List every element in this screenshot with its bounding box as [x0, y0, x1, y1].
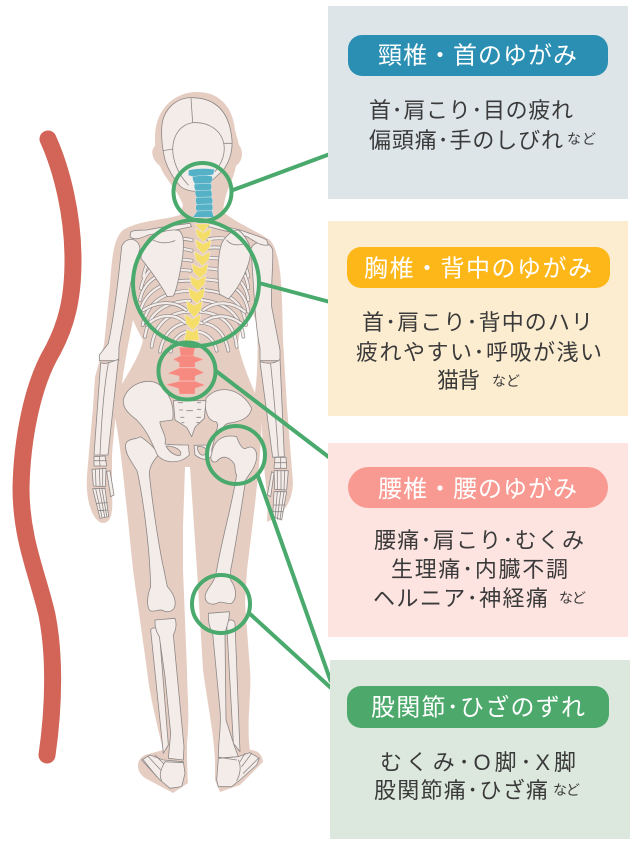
right tibia [208, 612, 238, 758]
lumbar heading [348, 467, 608, 508]
cervical symptoms: 偏頭痛･手のしびれ [369, 128, 563, 153]
left foot [142, 755, 185, 788]
joints symptoms: など [553, 782, 580, 798]
joints symptoms [374, 750, 580, 803]
joints heading: 股関節･ひざのずれ [371, 694, 585, 722]
left fibula [151, 628, 168, 753]
ribs [140, 238, 248, 352]
cervical symptoms: など [567, 131, 596, 147]
cervical heading: 頸椎・首のゆがみ [378, 42, 577, 70]
left tibia [155, 618, 184, 760]
joints symptoms: 股関節痛･ひざ痛 [374, 778, 548, 803]
right hip bone [194, 390, 252, 459]
right foot [217, 753, 259, 787]
lumbar symptoms: ヘルニア･神経痛 [373, 586, 548, 611]
lumbar symptoms: 生理痛･内臓不調 [391, 557, 568, 582]
upper skeleton: skull, arms, ribs [99, 98, 280, 361]
right fibula [227, 620, 240, 752]
panel: thoracic [328, 221, 628, 416]
left hand [92, 456, 114, 518]
lumbar heading: 腰椎・腰のゆがみ [378, 476, 577, 503]
lower skeleton: pelvis, femur, hands [92, 347, 288, 612]
thoracic symptoms: 首･肩こり･背中のハリ [362, 310, 593, 335]
left femur [126, 437, 175, 612]
right hand [267, 457, 288, 520]
lower legs and feet [142, 612, 259, 788]
thoracic heading [347, 247, 610, 288]
cervical symptoms [369, 98, 596, 153]
left forearm [94, 359, 118, 455]
thoracic symptoms [356, 310, 602, 393]
joints heading [347, 686, 609, 728]
lumbar symptoms: 腰痛･肩こり･むくみ [374, 528, 584, 553]
panel: cervical [328, 6, 628, 199]
cervical spine [188, 168, 215, 217]
panel: joints [330, 660, 630, 839]
lumbar symptoms: など [559, 590, 586, 606]
sacrum [173, 401, 206, 437]
right scapula [218, 230, 251, 299]
left arm bone [99, 239, 140, 361]
panel: lumbar [328, 443, 628, 637]
skull [162, 98, 232, 191]
lumbar spine [166, 347, 205, 394]
right femur [205, 436, 257, 604]
right arm bone [251, 242, 280, 361]
thoracic symptoms: など [492, 373, 520, 389]
callout circles and leader lines [133, 154, 331, 688]
cervical heading [348, 35, 608, 76]
left scapula [141, 230, 183, 297]
lumbar symptoms [373, 528, 586, 611]
thoracic symptoms: 疲れやすい･呼吸が浅い [356, 340, 602, 365]
left hip bone [123, 381, 189, 462]
left collarbone [130, 223, 192, 239]
body silhouette [87, 92, 293, 793]
thoracic spine [184, 224, 211, 341]
joints symptoms: むくみ･O脚･X脚 [380, 750, 576, 775]
curved red spine line [21, 139, 73, 755]
thoracic heading: 胸椎・背中のゆがみ [364, 256, 592, 282]
skeleton [92, 98, 288, 788]
right collarbone [208, 223, 268, 245]
cervical symptoms: 首･肩こり･目の疲れ [369, 98, 573, 123]
thoracic symptoms: 猫背 [437, 368, 480, 393]
right forearm [260, 359, 284, 457]
